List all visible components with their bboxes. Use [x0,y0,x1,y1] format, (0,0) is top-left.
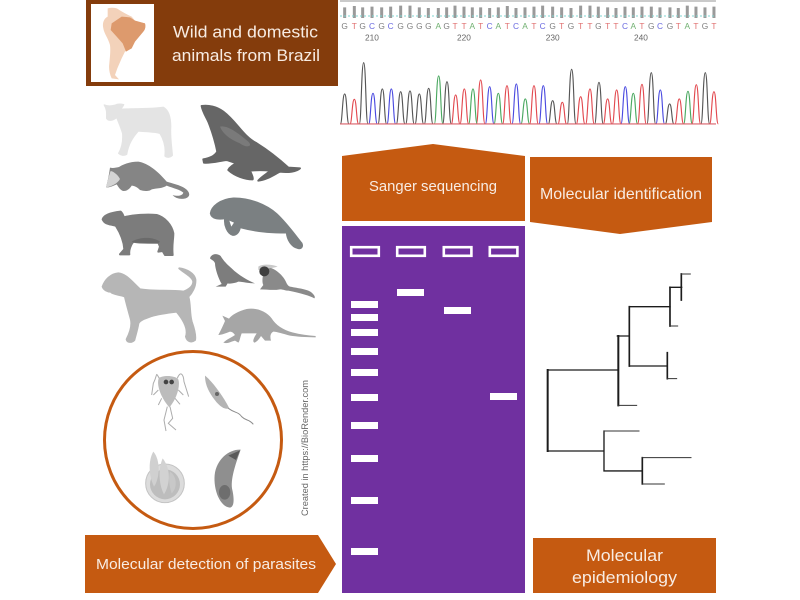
box: molecular epidemiology: epidemiology [572,568,678,587]
icon: capybara [103,212,173,255]
chromatogram: Sanger sequence trace: T [639,21,645,31]
chromatogram: Sanger sequence trace: G [397,21,404,31]
chromatogram: Sanger sequence trace: T [531,21,537,31]
credit text: Created in https://BioRender.com [300,380,310,516]
chromatogram: Sanger sequence trace: G [425,21,432,31]
chromatogram: Sanger sequence trace: 240 [634,32,648,42]
chromatogram: Sanger sequence trace: T [478,21,483,31]
chromatogram: Sanger sequence trace [340,1,718,124]
chromatogram: Sanger sequence trace: C [540,21,546,31]
chromatogram: Sanger sequence trace: G [648,21,655,31]
chromatogram: Sanger sequence trace: A [522,21,528,31]
chromatogram: Sanger sequence trace: T [676,21,681,31]
chromatogram: Sanger sequence trace: C [657,21,663,31]
icon: Toxoplasma cyst [146,452,184,503]
chromatogram: Sanger sequence trace: G [416,21,423,31]
icon: armadillo [218,309,316,343]
chromatogram: Sanger sequence trace: A [436,21,442,31]
chromatogram: Sanger sequence trace: G [341,21,348,31]
chromatogram: Sanger sequence trace: T [605,21,610,31]
chromatogram: Sanger sequence trace: T [578,21,583,31]
icon: calf [104,104,172,157]
icon: marmoset [258,265,315,298]
chromatogram: Sanger sequence trace: C [388,21,394,31]
arrow: molecular identification: Molecular identification [540,186,702,203]
icon: opossum [106,162,189,199]
chromatogram: Sanger sequence trace: G [595,21,602,31]
chromatogram: Sanger sequence trace: 230 [546,32,560,42]
chromatogram: Sanger sequence trace: T [711,21,717,31]
icon: Giardia [152,374,189,431]
chromatogram: Sanger sequence trace: C [369,21,375,31]
arrow: Sanger sequencing: Sanger sequencing [369,178,497,195]
arrow: Sanger sequencing [342,144,525,221]
chromatogram: Sanger sequence trace: G [568,21,574,31]
icon: dog [103,268,195,342]
arrow: molecular identification [530,157,712,234]
chromatogram: Sanger sequence trace: C [513,21,519,31]
icon: Cryptosporidium sporozoite [214,450,241,508]
icon: sea lion [202,106,300,181]
chromatogram: Sanger sequence trace: T [352,21,357,31]
chromatogram: Sanger sequence trace: G [378,21,385,31]
chromatogram: Sanger sequence trace: C [622,21,628,31]
sample bands [397,289,517,400]
chromatogram: Sanger sequence trace: T [693,21,699,31]
chromatogram: Sanger sequence trace: T [613,21,619,31]
gel wells [351,247,517,256]
icon: manatee [211,198,302,248]
chromatogram: Sanger sequence trace: G [667,21,673,31]
box: molecular epidemiology [533,538,716,593]
chromatogram: Sanger sequence trace: T [452,21,458,31]
chromatogram: Sanger sequence trace: T [461,21,467,31]
icon: map of South America with Brazil [91,4,154,82]
phylogenetic tree [548,274,691,484]
arrow: molecular detection of parasites: Molecular detection of parasites [96,556,316,573]
chromatogram: Sanger sequence trace: A [496,21,502,31]
icon: Trypanosoma [205,376,253,424]
chromatogram: Sanger sequence trace: A [631,21,637,31]
header panel: wild and domestic animals [86,0,338,86]
arrow: molecular detection of parasites [85,535,336,593]
chromatogram: Sanger sequence trace: A [685,21,691,31]
header title [172,24,320,65]
chromatogram: Sanger sequence trace: A [470,21,476,31]
chromatogram: Sanger sequence trace: C [487,21,493,31]
chromatogram: Sanger sequence trace: G [443,21,450,31]
electrophoresis gel [342,226,525,593]
chromatogram: Sanger sequence trace: T [587,21,593,31]
chromatogram: Sanger sequence trace: G [359,21,366,31]
header title: Wild and domestic [173,24,318,42]
chromatogram: Sanger sequence trace: 220 [457,32,471,42]
chromatogram: Sanger sequence trace: T [559,21,564,31]
icon: parrot [210,254,255,287]
panel: parasites circle [104,352,282,528]
chromatogram: Sanger sequence trace: G [407,21,413,31]
chromatogram: Sanger sequence trace: T [505,21,510,31]
chromatogram: Sanger sequence trace: G [702,21,708,31]
box: molecular epidemiology: Molecular [586,546,663,565]
chromatogram: Sanger sequence trace: 210 [365,32,379,42]
ladder bands [351,301,378,555]
header title: animals from Brazil [172,47,320,65]
chromatogram: Sanger sequence trace: G [549,21,556,31]
